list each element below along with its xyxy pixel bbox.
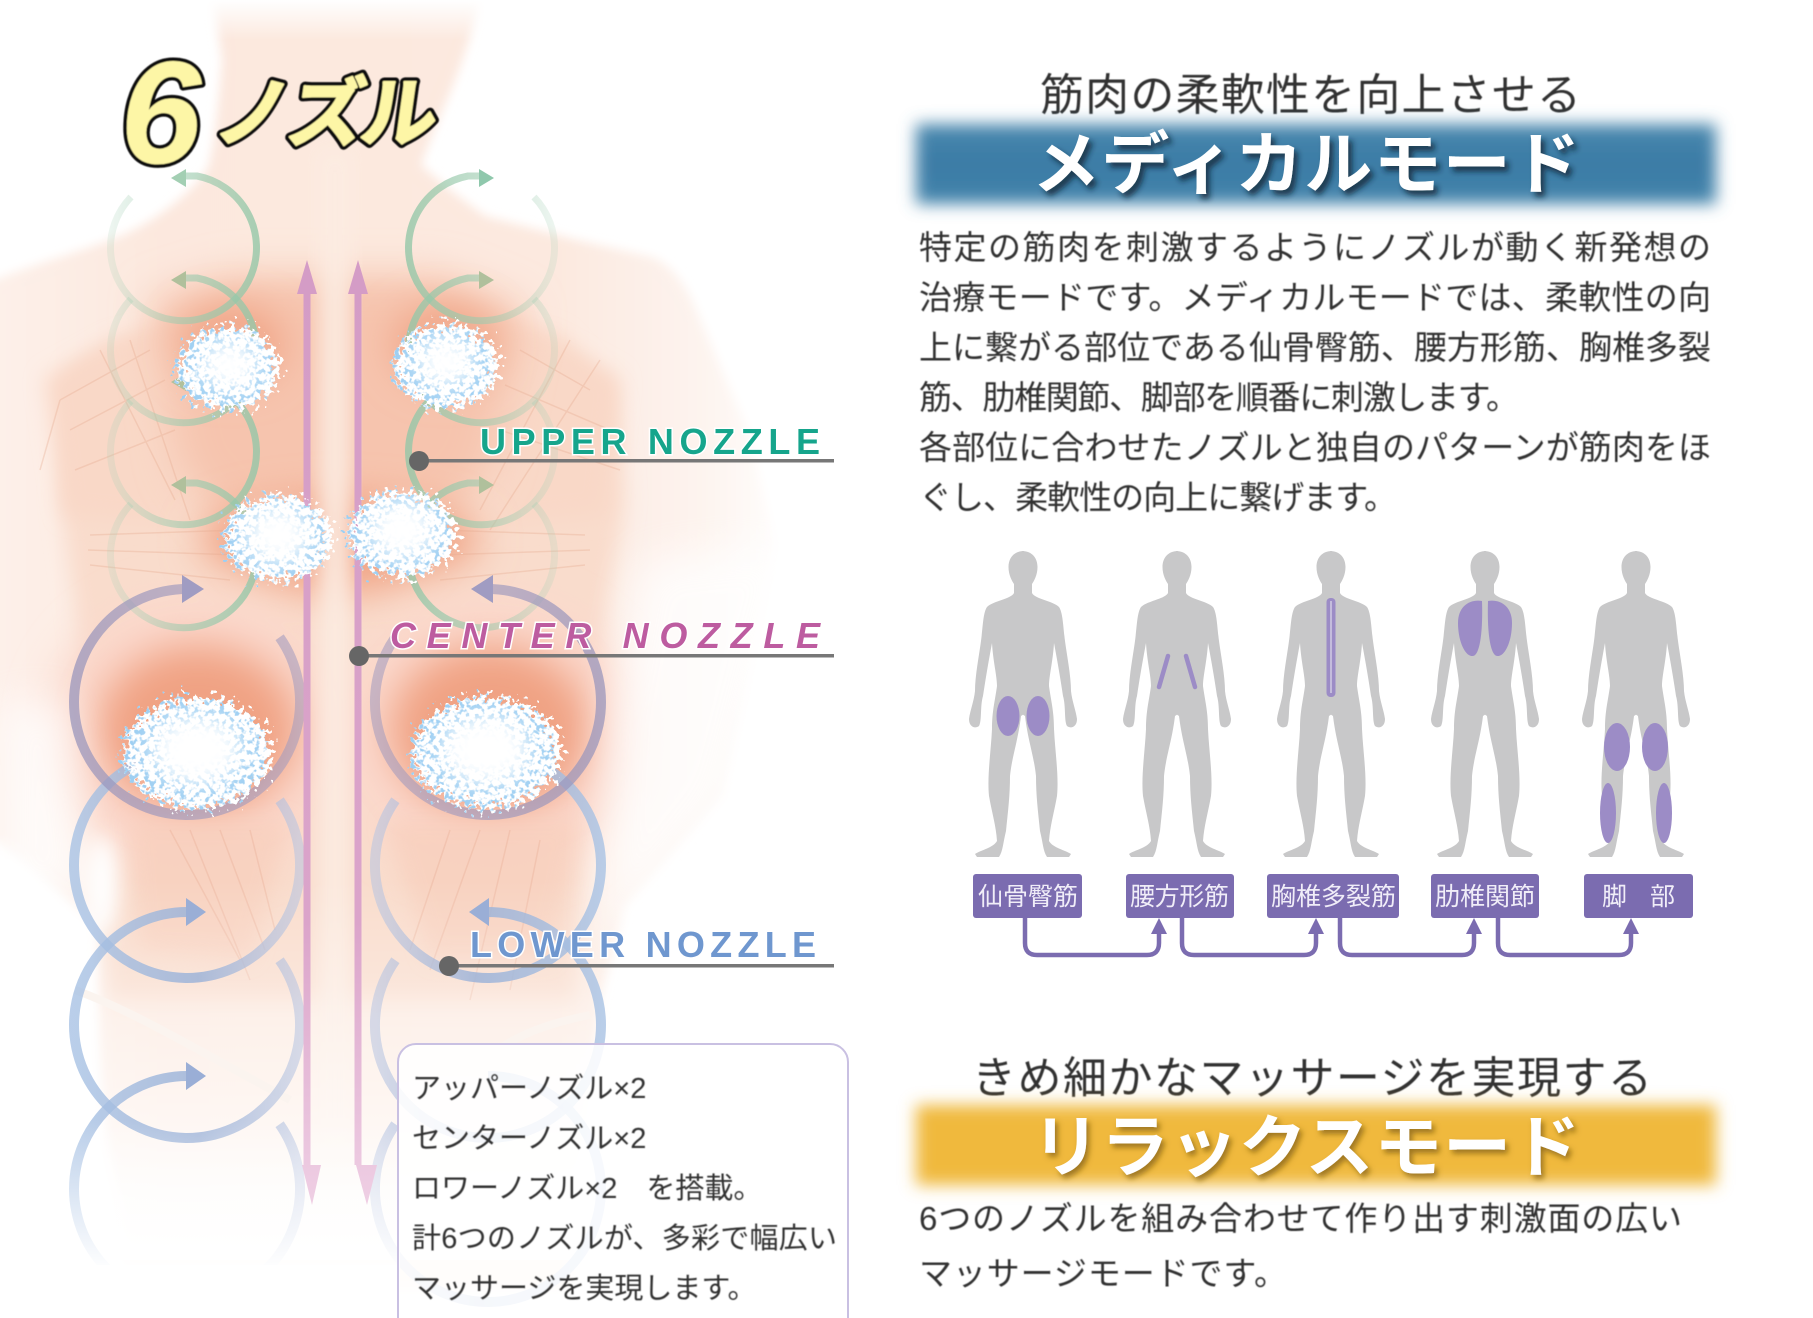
step labels [973, 874, 1693, 918]
banner: relax mode [916, 1105, 1716, 1186]
label: lower nozzle [439, 924, 834, 976]
callout: nozzle summary: センターノズル×2 [412, 1122, 646, 1155]
callout: nozzle summary: ロワーノズル×2 を搭載。 [412, 1172, 762, 1205]
upper nozzle arrowheads, left [171, 169, 186, 494]
lower nozzle flow loops, left [74, 589, 300, 1302]
heading: medical mode subtitle: 筋肉の柔軟性を向上させる [1040, 71, 1581, 120]
illustration: human back with muscles [0, 0, 800, 1290]
back muscle base [60, 290, 625, 1000]
text: relax mode description: 6つのノズルを組み合わせて作り出す刺激面の広い [919, 1200, 1682, 1237]
upper nozzle flow loops, right [409, 169, 555, 628]
heading: relax mode subtitle: きめ細かなマッサージを実現する [972, 1054, 1652, 1103]
banner: medical mode: メディカルモード [1032, 127, 1580, 203]
text: relax mode description [919, 1200, 1682, 1292]
fade of lower back [0, 880, 700, 1260]
text: medical mode description: 治療モードです。メディカルモードでは、柔軟性の向 [919, 279, 1711, 316]
orange muscle hot spots [98, 307, 590, 815]
step labels: 腰方形筋 [1130, 883, 1229, 911]
title: 6 nozzles: ノズル [210, 72, 444, 157]
water jet foam [123, 324, 560, 809]
banner: medical mode [916, 124, 1716, 204]
pelvis line [75, 990, 590, 1100]
text: medical mode description: 筋、肋椎関節、脚部を順番に刺激します。 [919, 379, 1519, 416]
body silhouette [0, 0, 775, 1290]
text: medical mode description: 上に繋がる部位である仙骨臀筋、腰方形筋、胸椎多裂 [919, 329, 1711, 366]
center nozzle flow arrows [297, 260, 377, 1205]
sequence arrows [1025, 918, 1639, 955]
figure: thoracic multifidus [1277, 551, 1385, 857]
arm whites [0, 540, 800, 960]
trapezius shading [150, 275, 525, 600]
callout: nozzle summary [398, 1044, 848, 1318]
text: medical mode description: 各部位に合わせたノズルと独自のパターンが筋肉をほ [919, 429, 1711, 466]
figure: quadratus lumborum [1123, 551, 1231, 857]
callout: nozzle summary: アッパーノズル×2 [412, 1072, 646, 1105]
step labels: 胸椎多裂筋 [1271, 883, 1396, 911]
fade bottom area [0, 1265, 400, 1318]
banner: relax mode: リラックスモード [1032, 1110, 1580, 1186]
lower nozzle arrowheads, left [182, 575, 206, 1090]
muscle fibres [40, 340, 620, 1000]
label: center nozzle: CENTER NOZZLE [390, 615, 821, 656]
lower back strands [130, 820, 580, 960]
fade top [190, 0, 510, 40]
step labels: 肋椎関節 [1435, 883, 1535, 911]
step labels: 脚 部 [1602, 883, 1675, 911]
title: 6 nozzles [120, 31, 444, 194]
spine [318, 150, 352, 1150]
outer pink glow [45, 595, 640, 875]
callout: nozzle summary: マッサージを実現します。 [412, 1272, 757, 1305]
waist whites [0, 835, 118, 1130]
label: lower nozzle: LOWER NOZZLE [470, 924, 816, 965]
text: medical mode description: 特定の筋肉を刺激するようにノズルが動く新発想の [919, 229, 1711, 266]
text: relax mode description: マッサージモードです。 [919, 1255, 1287, 1292]
lower nozzle flow loops, right [375, 575, 601, 1302]
figure: legs [1582, 551, 1690, 857]
title: 6 nozzles: 6 [120, 31, 202, 194]
label: upper nozzle: UPPER NOZZLE [480, 421, 820, 462]
callout: nozzle summary: 計6つのノズルが、多彩で幅広い [412, 1222, 837, 1255]
figure: gluteal muscles [969, 551, 1077, 857]
text: medical mode description [919, 229, 1711, 516]
shoulder blade muscles [45, 330, 620, 525]
figure: costovertebral joints [1431, 551, 1539, 857]
fade of bottom loops [0, 1120, 400, 1270]
upper nozzle flow loops, left [110, 176, 256, 628]
label: upper nozzle [409, 421, 834, 471]
text: medical mode description: ぐし、柔軟性の向上に繋げます。 [919, 479, 1397, 516]
step labels: 仙骨臀筋 [978, 883, 1078, 911]
title: 6 nozzles: ノズル [210, 72, 444, 157]
